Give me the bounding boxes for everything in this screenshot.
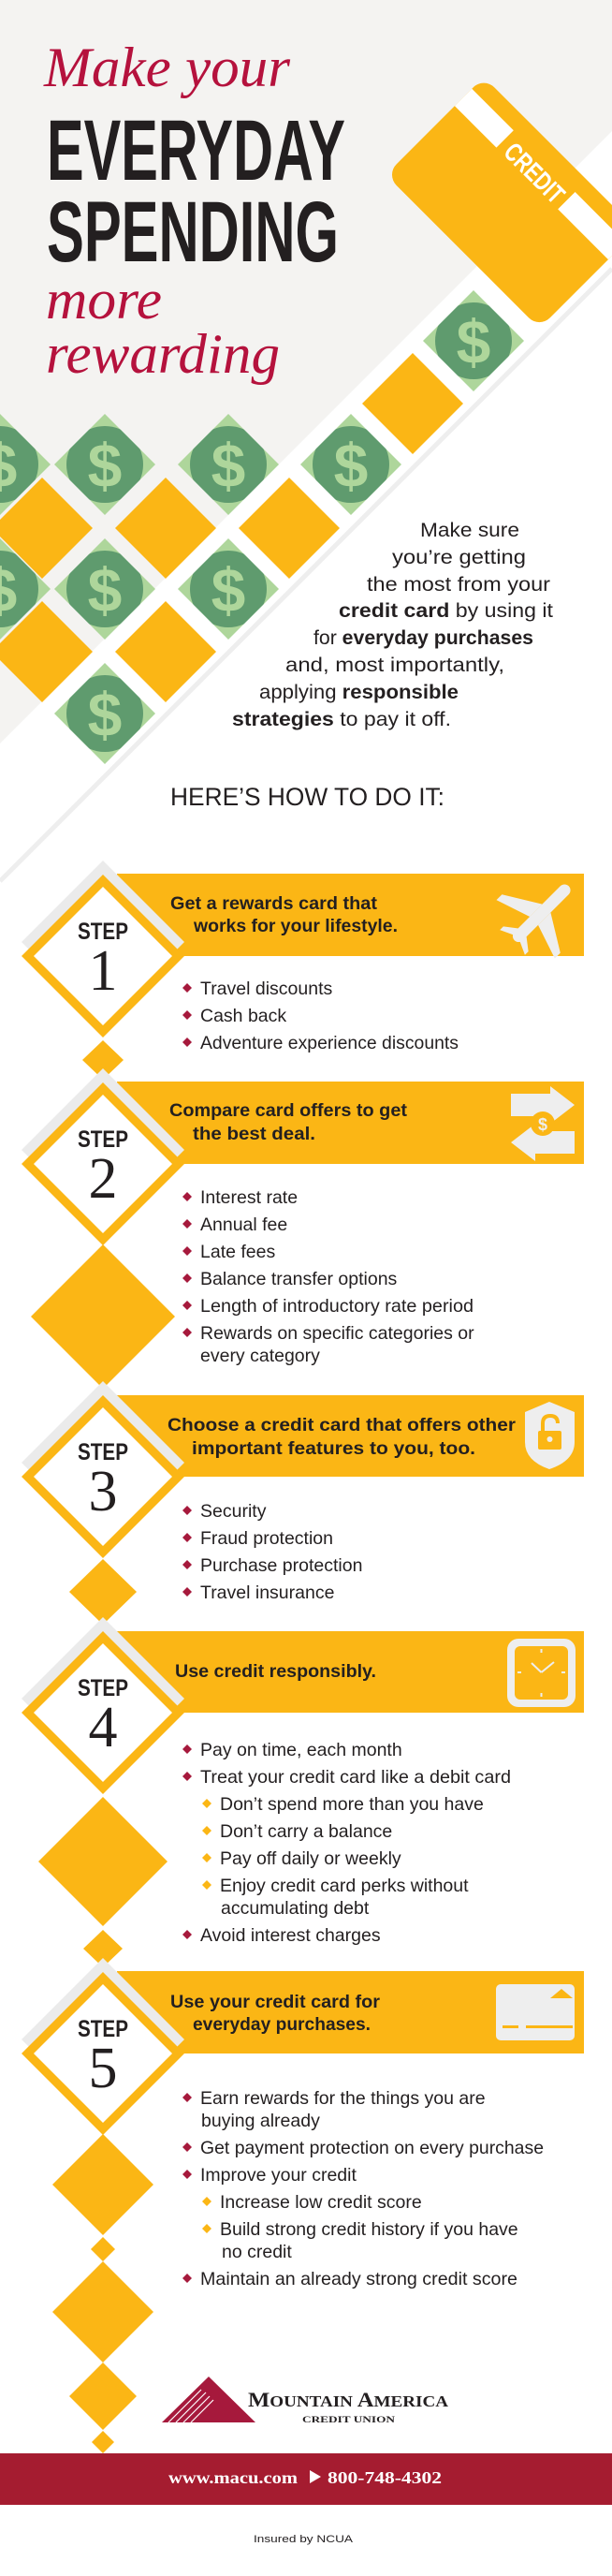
- icon: shield lock: [525, 1402, 575, 1469]
- step 2 panel: Late fees: [200, 1242, 275, 1262]
- step 5 panel: Get payment protection on every purchase: [200, 2138, 544, 2158]
- title: Make your: [43, 37, 291, 98]
- step 4 panel: Pay on time, each month: [200, 1740, 402, 1760]
- step 3 panel: Purchase protection: [200, 1555, 362, 1576]
- step 2 panel: STEP: [78, 1126, 128, 1153]
- step 5 panel: Use your credit card for: [170, 1993, 381, 2012]
- footer band: [0, 2453, 612, 2505]
- step 3 panel: Fraud protection: [200, 1528, 333, 1549]
- step 2 panel: Annual fee: [200, 1214, 287, 1235]
- step 2 panel: Compare card offers to get: [169, 1101, 408, 1121]
- intro text: [232, 520, 553, 730]
- title: rewarding: [46, 323, 280, 385]
- step 3 panel: Travel insurance: [200, 1582, 334, 1603]
- insured note: Insured by NCUA: [254, 2534, 354, 2545]
- step 1 panel: Cash back: [200, 1006, 286, 1026]
- step 3 panel: STEP: [78, 1439, 128, 1465]
- icon: exchange arrows: $: [538, 1115, 547, 1134]
- step 2 panel: 2: [88, 1147, 118, 1211]
- step 4 panel: 4: [88, 1696, 118, 1759]
- background grey area: [0, 0, 612, 743]
- step 4 panel: Don’t spend more than you have: [220, 1794, 484, 1815]
- step 4 panel: Avoid interest charges: [200, 1925, 381, 1946]
- step 4 panel: Pay off daily or weekly: [220, 1848, 401, 1869]
- step 2 panel: Rewards on specific categories or: [200, 1323, 474, 1344]
- step 5 panel: everyday purchases.: [193, 2015, 371, 2035]
- step 3 panel: important features to you, too.: [192, 1439, 475, 1459]
- intro text: for everyday purchases: [313, 627, 533, 649]
- step 1 panel: STEP: [78, 919, 128, 945]
- step 2 panel: Interest rate: [200, 1187, 298, 1208]
- step 2 panel: Balance transfer options: [200, 1269, 398, 1289]
- intro text: you’re getting: [392, 547, 526, 568]
- intro text: Make sure: [420, 520, 519, 541]
- step 2 panel: every category: [200, 1346, 320, 1366]
- step 2 panel: the best deal.: [193, 1125, 315, 1144]
- step 3 panel: Security: [200, 1501, 267, 1522]
- heading: here's how: HERE’S HOW TO DO IT:: [170, 783, 444, 811]
- title: EVERYDAY: [47, 103, 345, 199]
- step 5 panel: Build strong credit history if you have: [220, 2219, 518, 2240]
- icon: card: [496, 1984, 575, 2040]
- step 4 panel: [22, 1617, 584, 1946]
- intro text: credit card by using it: [339, 600, 553, 622]
- step 1 panel: 1: [88, 939, 118, 1003]
- step 3 panel: 3: [88, 1460, 118, 1524]
- step 4 panel: Use credit responsibly.: [175, 1662, 376, 1682]
- step 2 panel: [22, 1068, 584, 1366]
- step 5 panel: Increase low credit score: [220, 2192, 422, 2213]
- icon: credit card: CREDIT: [499, 137, 571, 209]
- money diamonds pattern: [0, 290, 524, 764]
- icon: airplane: [483, 857, 598, 972]
- intro text: applying responsible: [259, 682, 459, 703]
- icon: clock: [507, 1639, 576, 1707]
- step 5 panel: STEP: [78, 2016, 128, 2042]
- step 4 panel: Treat your credit card like a debit card: [200, 1767, 511, 1788]
- step 5 panel: no credit: [222, 2242, 292, 2262]
- step 4 panel: accumulating debt: [221, 1898, 370, 1919]
- logo: [162, 2377, 449, 2424]
- step 1 panel: Travel discounts: [200, 979, 333, 999]
- footer band: www.macu.com: [168, 2468, 298, 2487]
- step 3 panel: [22, 1381, 584, 1603]
- step 4 panel: Don’t carry a balance: [220, 1821, 392, 1842]
- logo: MOUNTAIN AMERICA: [248, 2388, 449, 2411]
- step 5 panel: Earn rewards for the things you are: [200, 2088, 486, 2109]
- icon: credit card: [386, 77, 612, 329]
- step 1 panel: [22, 857, 598, 1053]
- footer band: 800-748-4302: [328, 2468, 442, 2487]
- step 5 panel: Maintain an already strong credit score: [200, 2269, 517, 2289]
- step 5 panel: Improve your credit: [200, 2165, 357, 2186]
- logo: CREDIT UNION: [302, 2415, 396, 2424]
- connector diamonds: [31, 1040, 175, 2453]
- step 1 panel: Get a rewards card that: [170, 894, 378, 914]
- intro text: strategies to pay it off.: [232, 709, 451, 730]
- step 5 panel: buying already: [201, 2111, 320, 2131]
- step 4 panel: STEP: [78, 1675, 128, 1701]
- step 5 panel: 5: [88, 2037, 118, 2100]
- step 4 panel: Enjoy credit card perks without: [220, 1876, 469, 1896]
- step 2 panel: Length of introductory rate period: [200, 1296, 474, 1317]
- icon: exchange arrows: [511, 1086, 575, 1161]
- title: [43, 37, 345, 385]
- step 3 panel: Choose a credit card that offers other: [168, 1416, 517, 1435]
- intro text: and, most importantly,: [285, 655, 504, 676]
- step 1 panel: works for your lifestyle.: [193, 917, 398, 936]
- step 5 panel: [22, 1958, 584, 2289]
- title: SPENDING: [47, 184, 339, 280]
- title: more: [46, 269, 162, 331]
- intro text: the most from your: [367, 574, 550, 596]
- step 1 panel: Adventure experience discounts: [200, 1033, 459, 1053]
